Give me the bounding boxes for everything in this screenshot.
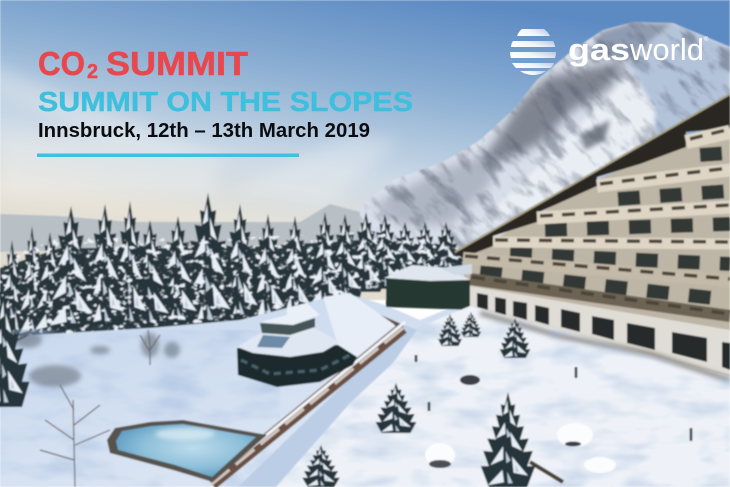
bare trees bbox=[40, 330, 160, 487]
cupola roof bbox=[260, 303, 320, 325]
mountain: rock outcrops bbox=[580, 120, 610, 150]
conservatory bbox=[384, 264, 472, 310]
snow humps and posts bbox=[416, 355, 691, 482]
cupola bbox=[260, 318, 315, 335]
mountain bbox=[360, 21, 730, 250]
accent rule bbox=[37, 154, 299, 157]
glass body bbox=[237, 345, 357, 387]
mountain: bright snow slope bbox=[470, 75, 655, 232]
mountain: shaded east face bbox=[627, 23, 730, 142]
foreground trees bbox=[302, 312, 535, 487]
title: CO2 Summit bbox=[38, 45, 248, 83]
hotel bbox=[455, 93, 730, 380]
mountain: west ridge shade bbox=[375, 150, 500, 225]
drifts bbox=[0, 330, 280, 487]
logo wordmark bbox=[568, 32, 704, 67]
road beside fence bbox=[238, 325, 417, 487]
date and location: Innsbruck, 12th – 13th March 2019 bbox=[38, 120, 370, 142]
shrubs left bbox=[14, 332, 180, 387]
balconies bbox=[463, 129, 730, 316]
gasworld logo bbox=[510, 29, 709, 75]
fence bbox=[212, 322, 405, 484]
forest backdrop bbox=[0, 240, 470, 352]
snow on forest bbox=[0, 232, 464, 340]
title: CO2 Summit: CO bbox=[38, 45, 85, 82]
snow drifts right bbox=[270, 320, 730, 487]
windows bbox=[480, 153, 730, 300]
logo sphere bbox=[510, 29, 556, 75]
mountain: summit band bbox=[590, 22, 673, 60]
pavilion bbox=[237, 293, 395, 387]
roof glazing bbox=[257, 335, 290, 348]
terrace rail bbox=[358, 307, 403, 327]
logo wordmark: gas bbox=[568, 32, 630, 67]
forest trees bbox=[0, 193, 465, 345]
snowfield right bbox=[275, 306, 730, 487]
subtitle: SUMMIT ON THE SLOPES bbox=[38, 86, 413, 117]
wall bbox=[462, 125, 730, 380]
main roof bbox=[237, 327, 340, 357]
snow ground bbox=[0, 293, 730, 487]
logo wordmark: world bbox=[629, 32, 704, 67]
sky bbox=[0, 0, 730, 300]
ground floor bbox=[470, 286, 730, 375]
mountain: dark rock band bbox=[480, 60, 627, 165]
pool bbox=[107, 420, 267, 482]
registered mark: ® bbox=[704, 36, 709, 43]
title: CO2 Summit: 2 bbox=[87, 61, 98, 83]
left edge tree bbox=[0, 292, 30, 407]
title: CO2 Summit: SUMMIT bbox=[106, 45, 248, 82]
roof bbox=[455, 93, 730, 258]
snow bank bbox=[323, 293, 395, 357]
clouds bbox=[0, 60, 400, 205]
hedge beneath hotel bbox=[480, 313, 730, 380]
distant hills bbox=[0, 204, 460, 252]
